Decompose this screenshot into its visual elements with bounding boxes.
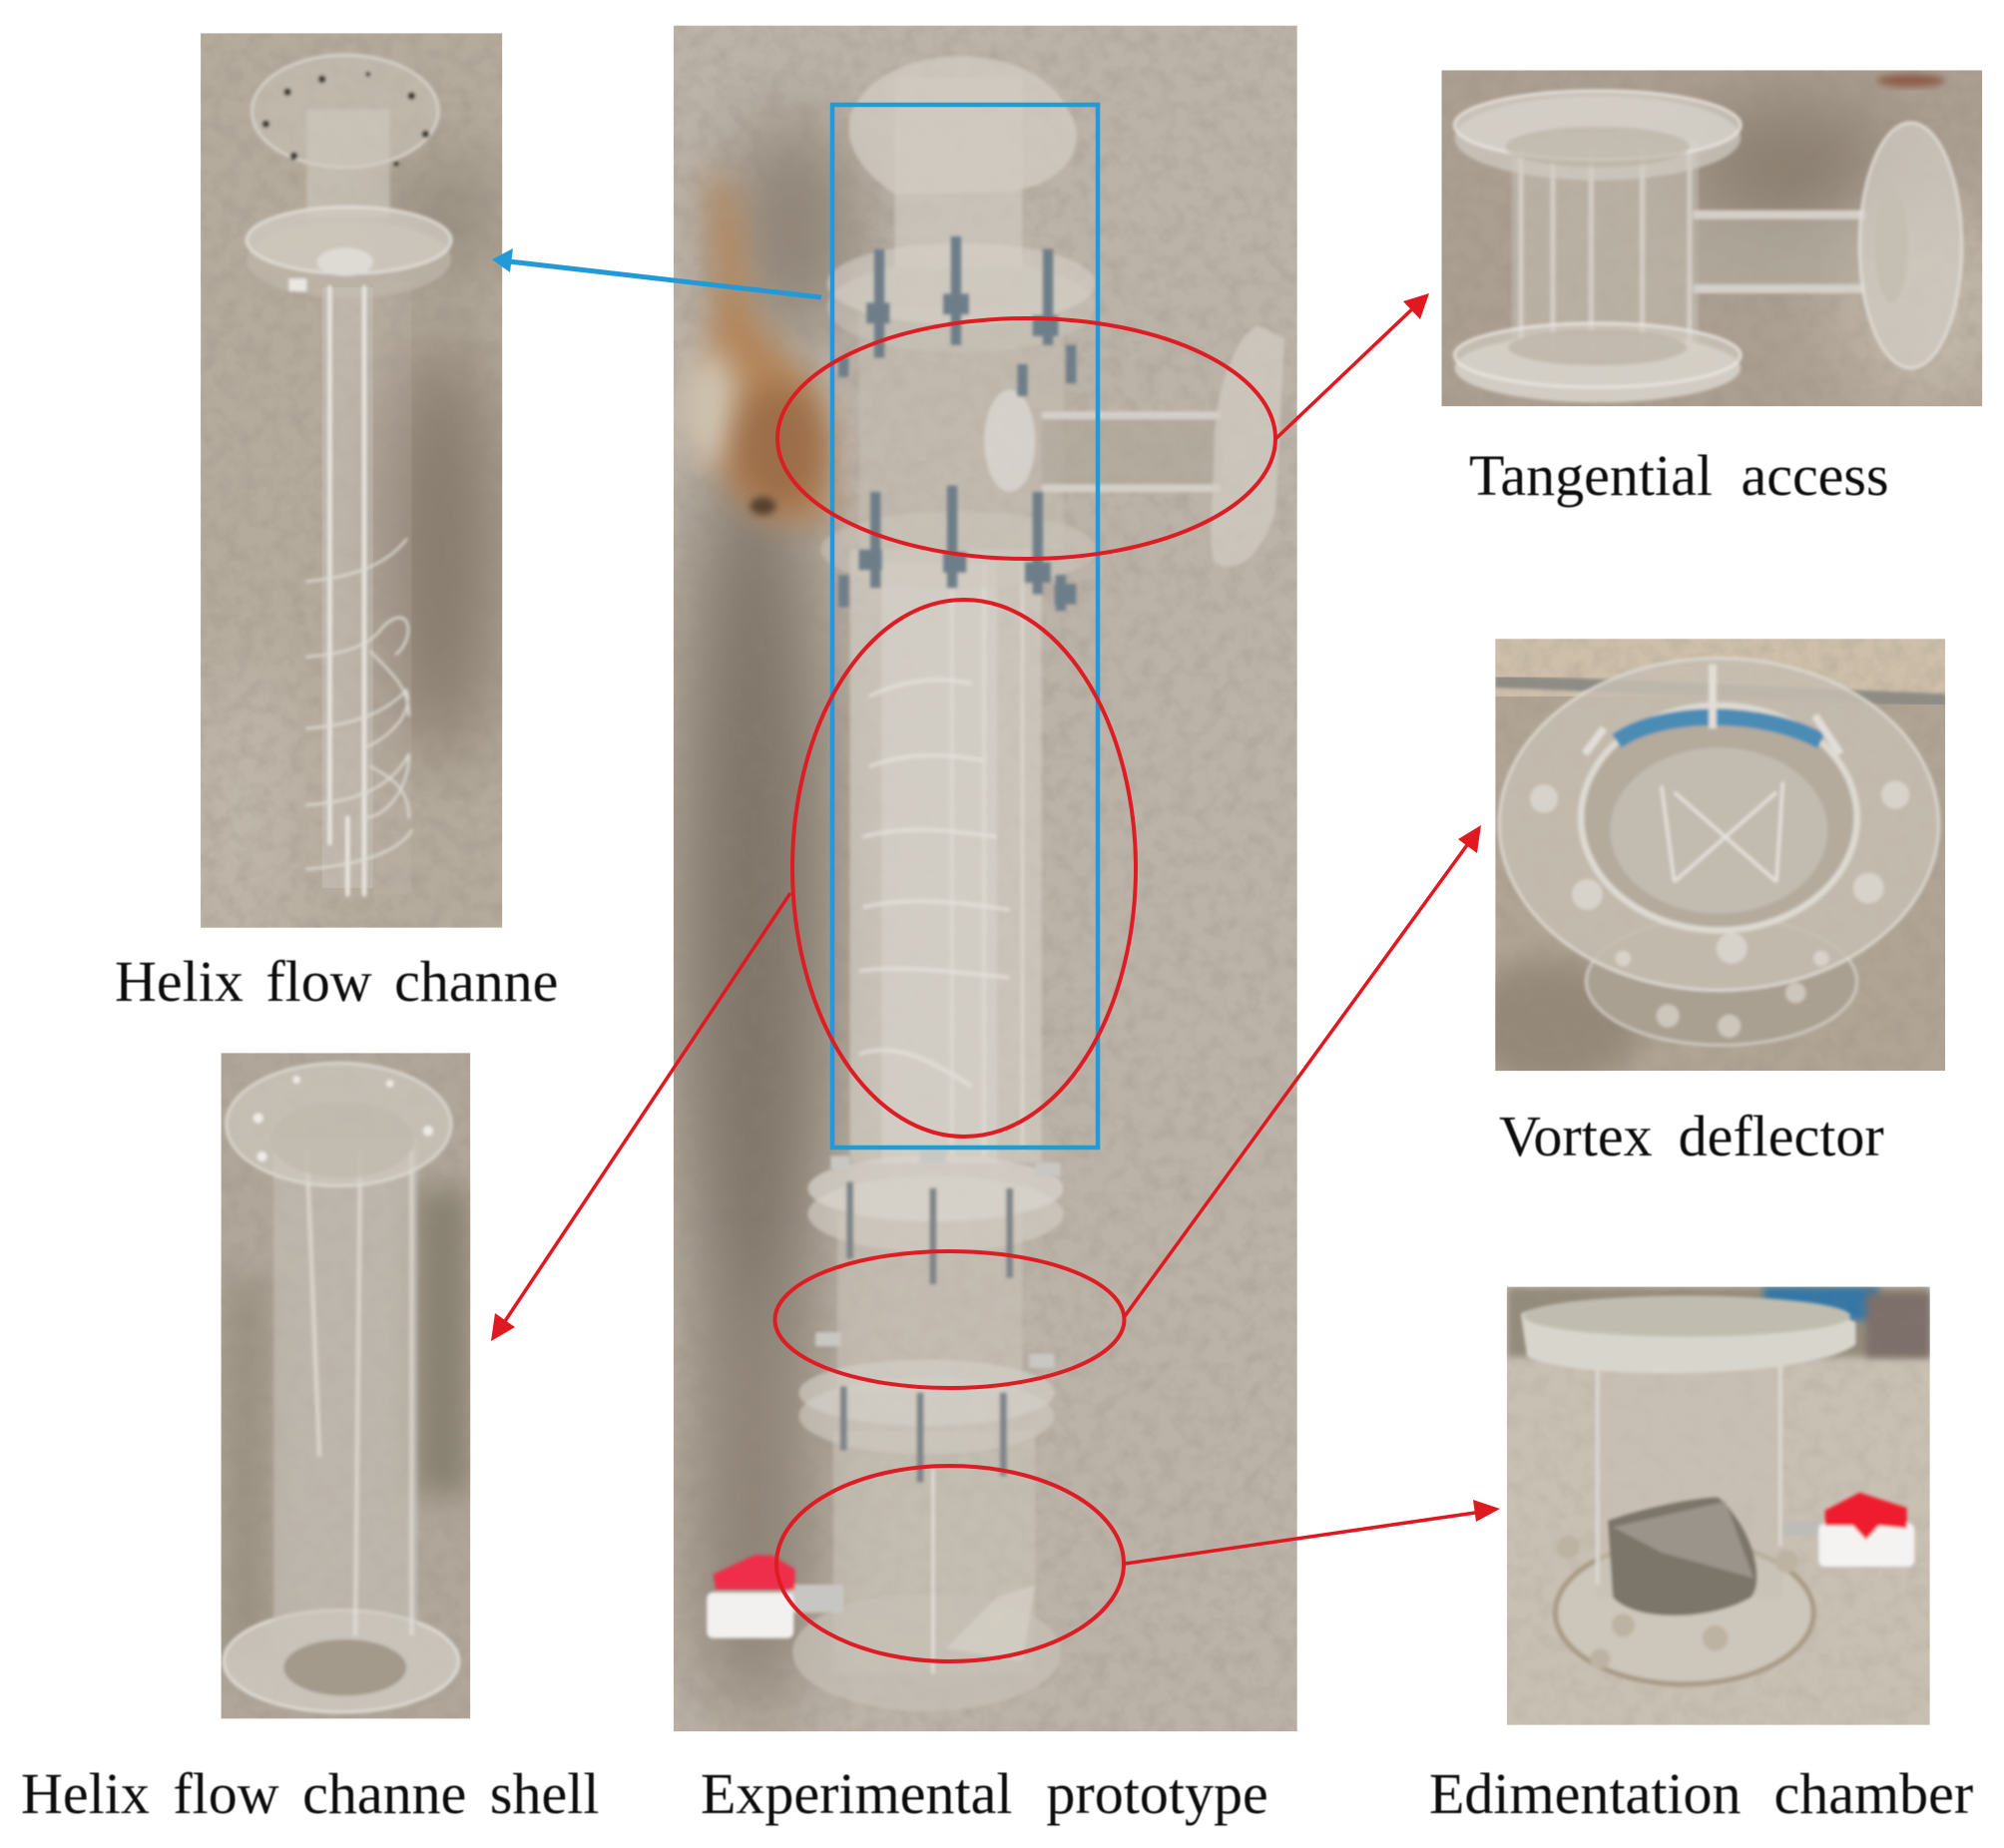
panel: helix flow channel photo (186, 33, 502, 971)
icon: valve (1784, 1493, 1914, 1567)
icon: acrylic spool (1454, 91, 1962, 402)
icon: bolts (815, 236, 1076, 1482)
label: vortex deflector: Vortex deflector (1499, 1104, 1884, 1168)
icon: drain valve (707, 1555, 843, 1638)
panel: sedimentation chamber photo (1507, 1287, 1930, 1725)
ellipse: sedimentation chamber region (776, 1466, 1124, 1661)
label: helix flow channe: Helix flow channe (115, 949, 558, 1014)
icon: central rod with helix (306, 281, 411, 894)
ellipse: helix shell region (792, 600, 1136, 1137)
panel: helix flow channel shell photo (222, 1053, 470, 1718)
arrow: to tangential access (1275, 293, 1429, 439)
label: experimental prototype: Experimental prototype (701, 1761, 1268, 1826)
icon: flanges (798, 242, 1097, 1454)
panel: vortex deflector photo (1463, 639, 1945, 1087)
panel: tangential access photo (1442, 70, 2004, 409)
arrow: to vortex deflector (1125, 825, 1481, 1316)
label: edimentation chamber: Edimentation chamber (1429, 1761, 1973, 1826)
icon: acrylic tube (224, 1063, 459, 1712)
ellipse: tangential access region (777, 318, 1275, 559)
icon: deflector flange (1499, 659, 1939, 1046)
icon: rust stain (682, 172, 830, 524)
arrow: to sedimentation chamber (1125, 1500, 1500, 1564)
icon: acrylic column (792, 56, 1077, 1711)
icon: helix ribs in main tube (859, 680, 1010, 1087)
label: tangential access: Tangential access (1469, 443, 1889, 508)
panel: experimental prototype photo (674, 26, 1297, 1731)
arrow: to helix flow channel (492, 248, 821, 297)
icon: side inlet and flange (984, 326, 1284, 567)
label: helix flow channe shell: Helix flow channe shell (21, 1761, 599, 1826)
arrow: to helix shell (491, 893, 790, 1341)
ellipse: vortex deflector region (774, 1251, 1124, 1388)
icon: lower flange (247, 207, 451, 297)
rectangle: helix section highlight (832, 105, 1098, 1148)
icon: sediment (1608, 1497, 1756, 1616)
icon: chamber cylinder (1521, 1296, 1855, 1684)
icon: upper flange (251, 55, 438, 218)
